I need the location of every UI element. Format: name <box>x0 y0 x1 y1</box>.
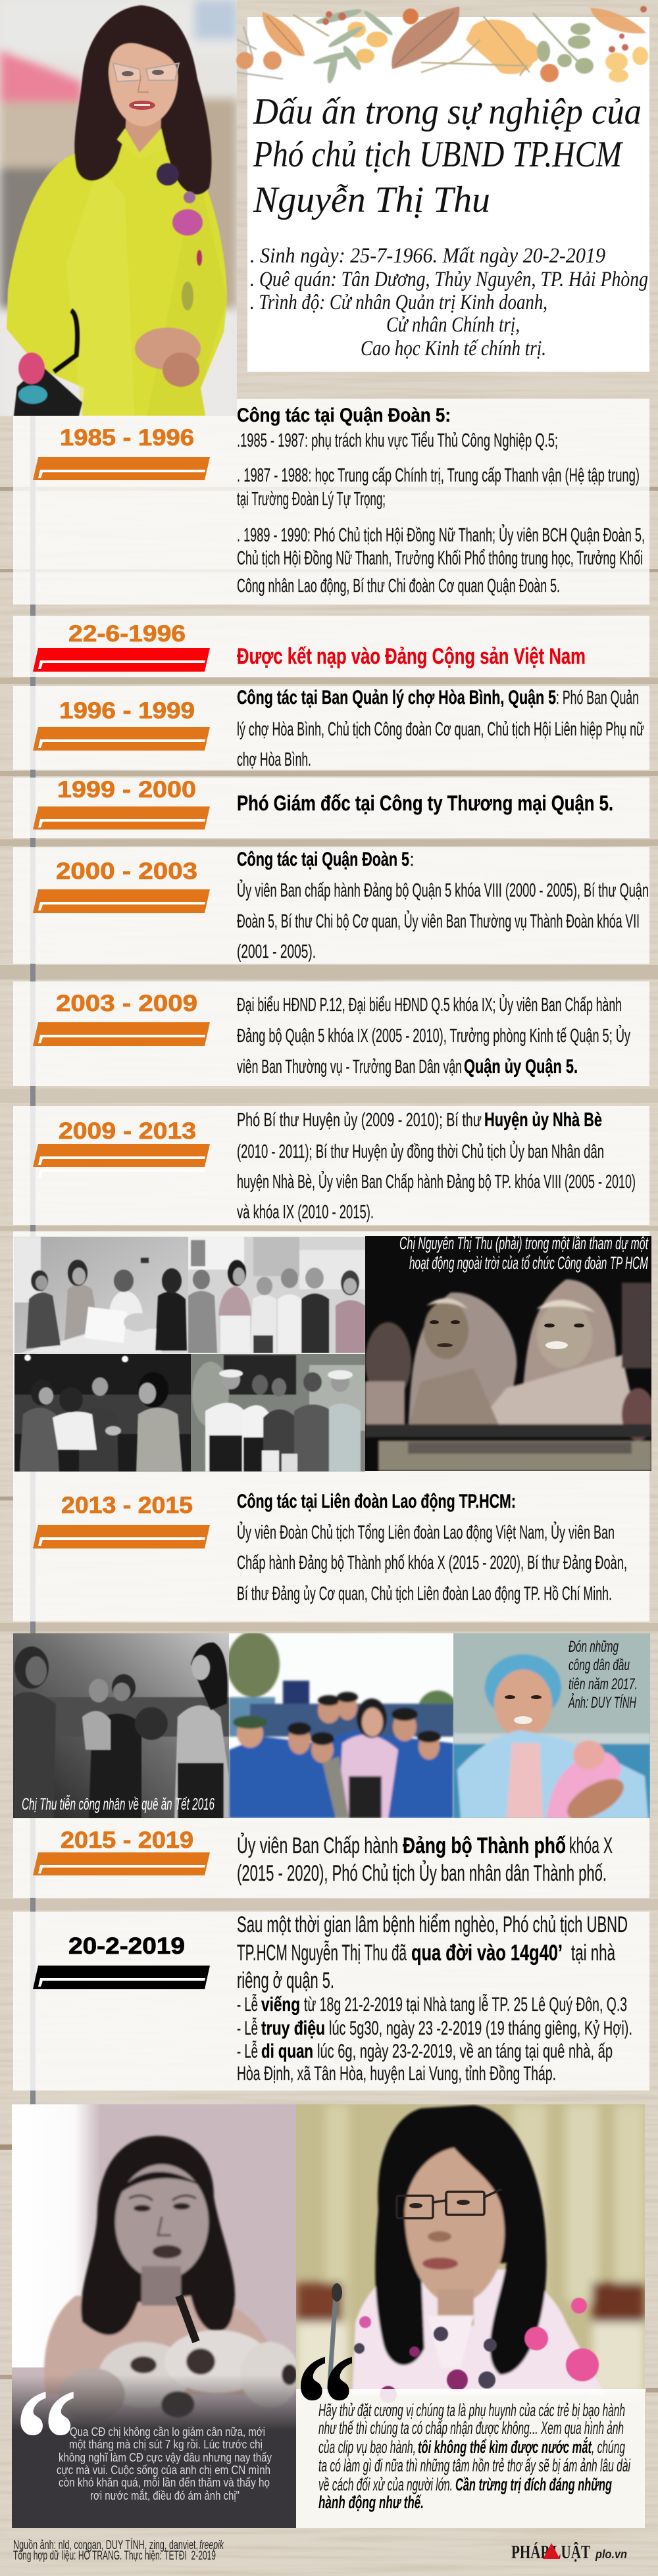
career text: 2015 - 2019: khóa X <box>569 1833 613 1858</box>
quote text: right: , chúng <box>592 2437 625 2457</box>
portrait photo: woman in yellow ao dai <box>0 0 237 421</box>
credits: freepik <box>199 2539 224 2552</box>
panel: 2015-2019 <box>13 1818 649 1898</box>
decoration: autumn leaves <box>236 6 648 84</box>
caption: seeing off workers: Chị Thu tiễn công nhân về quê ăn Tết 2016 <box>22 1795 215 1814</box>
career text: 20-2-2019: truy điệu <box>261 2018 325 2039</box>
logo: Pháp Luật plo.vn: plo.vn <box>595 2548 627 2561</box>
career text: 1985 - 1996 <box>237 405 645 597</box>
career text: 20-2-2019: qua đời vào 14g40’ <box>411 1941 563 1966</box>
career text: 2009 - 2013: và khóa IX (2010 - 2015). <box>237 1202 374 1223</box>
caption: newborn photo <box>568 1638 638 1712</box>
biography facts: Cử nhân Chính trị, <box>386 313 520 337</box>
timeline tag: 2015 - 2019 <box>33 1827 210 1875</box>
career text: 2009 - 2013: Huyện ủy Nhà Bè <box>484 1109 602 1131</box>
title: Nguyễn Thị Thu <box>253 180 490 220</box>
biography facts: . Trình độ: Cử nhân Quản trị Kinh doanh, <box>250 291 547 314</box>
timeline tag: 20-2-2019 <box>33 1933 210 1989</box>
photo: hospital visit <box>14 1237 188 1353</box>
quote text: left: rơi nước mắt, điều đó ám ảnh chị" <box>90 2489 240 2502</box>
photo: night gathering with child <box>14 1354 191 1472</box>
career text: 20-2-2019: di quan <box>261 2041 313 2062</box>
credits <box>13 2539 224 2563</box>
timeline tag: 1996 - 1999 <box>33 698 210 751</box>
credits: Tổng hợp dữ liệu: HỒ TRANG. Thực hiện: TETĐI 2-2019 <box>13 2548 216 2563</box>
quote mark: right: “ <box>295 2324 356 2485</box>
career text: 20-2-2019: - Lễ <box>237 1994 258 2016</box>
quote mark: left: “ <box>14 2359 78 2519</box>
timeline tag: 2000 - 2003 <box>33 858 210 913</box>
timeline tag: 2009 - 2013 <box>33 1118 210 1177</box>
career text: 1996 - 1999: chợ Hòa Bình. <box>237 749 311 770</box>
career text: 20-2-2019: - Lễ <box>237 2041 258 2062</box>
timeline tag: 1996 - 1999: 1996 - 1999 <box>59 698 195 724</box>
timeline tag: 22-6-1996 <box>33 621 210 672</box>
career text: 2000 - 2003: : <box>409 849 415 870</box>
career text: 2003 - 2009: viên Ban Thường vụ - Trưởng Ban Dân vận <box>237 1056 462 1077</box>
timeline tag: 1985 - 1996: 1985 - 1996 <box>60 425 194 451</box>
photo: official holding newborn <box>453 1633 650 1827</box>
quote text: left: một tháng mà chị sút 7 kg rồi. Lúc trước chị <box>69 2438 263 2451</box>
career text: 20-2-2019: viếng <box>261 1994 300 2016</box>
timeline tag: 1999 - 2000 <box>33 777 210 830</box>
quote text: right <box>318 2400 631 2512</box>
photo: seeing off workers <box>13 1633 229 1822</box>
credits: Nguồn ảnh: nld, congan, DUY TÍNH, zing, danviet, <box>13 2539 198 2552</box>
heading card <box>247 17 649 372</box>
career text: 2013 - 2015 <box>237 1491 627 1604</box>
timeline tag: 22-6-1996: 22-6-1996 <box>68 621 186 647</box>
career text: 20-2-2019: riêng ở quận 5. <box>237 1968 334 1993</box>
caption: raincoat photo <box>399 1233 649 1273</box>
panel: 1985-1996 <box>13 399 649 605</box>
career text: 2013 - 2015: Công tác tại Liên đoàn Lao động TP.HCM: <box>237 1491 516 1512</box>
timeline tag: 1999 - 2000: 1999 - 2000 <box>57 777 196 803</box>
panel: 2009-2013 <box>13 1106 649 1225</box>
photo: youth union group <box>227 1631 457 1818</box>
timeline tag: 2003 - 2009 <box>33 991 210 1046</box>
career text: 20-2-2019: tại nhà <box>571 1941 615 1966</box>
career text: 2000 - 2003: (2001 - 2005). <box>237 941 316 962</box>
career text: 2003 - 2009 <box>237 993 630 1077</box>
quote text: right: hành động như thế. <box>318 2492 424 2512</box>
quote text: right: của clip vụ bạo hành, <box>318 2437 416 2457</box>
timeline tag: 1985 - 1996 <box>33 425 210 480</box>
quote text: left: không nghĩ làm CĐ cực vậy đâu nhưng nay thấy <box>59 2451 272 2464</box>
photo: portrait with quote, left <box>12 2104 299 2528</box>
career text: 1996 - 1999 <box>237 687 644 770</box>
career text: 2000 - 2003: Công tác tại Quận Đoàn 5 <box>237 849 409 870</box>
career text: 1985 - 1996: Công tác tại Quận Đoàn 5: <box>237 405 451 426</box>
timeline spine <box>30 416 36 2297</box>
career text: 1985 - 1996: tại Trường Đoàn Lý Tự Trọng; <box>237 489 386 510</box>
photo: group with elders <box>188 1237 365 1353</box>
timeline tag: 2015 - 2019: 2015 - 2019 <box>61 1827 193 1853</box>
timeline tag: 2000 - 2003: 2000 - 2003 <box>56 858 197 884</box>
timeline tag: 2003 - 2009: 2003 - 2009 <box>56 991 197 1016</box>
biography facts: Cao học Kinh tế chính trị. <box>361 337 546 360</box>
career text: 2009 - 2013: Phó Bí thư Huyện ủy (2009 - 2010); Bí thư <box>237 1110 482 1131</box>
quote text: left: cực mà vui. Cuộc sống của anh chị em CN mình <box>57 2464 270 2477</box>
career text: 2015 - 2019: Ủy viên Ban Chấp hành <box>237 1833 398 1858</box>
panel: 1999-2000 <box>13 778 649 838</box>
timeline tag: 20-2-2019: 20-2-2019 <box>68 1933 185 1959</box>
photo: five women at a doorway <box>191 1354 365 1472</box>
timeline tag: 2013 - 2015 <box>33 1493 210 1548</box>
panel: 2013-2015 <box>13 1231 649 1622</box>
career text: 20-2-2019: TP.HCM Nguyễn Thị Thu đã <box>237 1941 407 1966</box>
panel: 20-2-2019 <box>13 1912 649 2091</box>
panel: 2003-2009 <box>13 981 649 1086</box>
logo: Pháp Luật plo.vn: PHÁP LUẬT <box>511 2541 590 2563</box>
caption: newborn photo: Đón những <box>569 1638 619 1656</box>
face details <box>113 63 179 110</box>
timeline tag: 2013 - 2015: 2013 - 2015 <box>61 1493 193 1518</box>
career text: 2009 - 2013 <box>237 1109 636 1223</box>
photo: portrait with quote, right <box>296 2104 645 2528</box>
quote text: right: về cách đối xử của người lớn. <box>318 2475 453 2494</box>
career text: 2015 - 2019 <box>237 1833 613 1886</box>
quote text: left: còn khó khăn quá, mỗi lần đến thăm và thấy họ <box>59 2475 270 2489</box>
panel: 22-6-1996 <box>13 616 649 677</box>
career text: 20-2-2019: - Lễ <box>237 2018 258 2039</box>
panel: 2000-2003 <box>13 847 649 964</box>
panel: 1996-1999 <box>13 686 649 770</box>
title <box>253 91 642 220</box>
biography facts <box>250 244 648 360</box>
biography facts: . Sinh ngày: 25-7-1966. Mất ngày 20-2-2019 <box>250 244 605 268</box>
photo: women in raincoats <box>365 1236 655 1471</box>
career text: 2015 - 2019: Đảng bộ Thành phố <box>403 1833 566 1858</box>
title: Dấu ấn trong sự nghiệp của <box>253 91 642 132</box>
career text: 20-2-2019 <box>237 1912 632 2085</box>
career text: 2003 - 2009: Quận ủy Quận 5. <box>464 1056 578 1077</box>
career text: 2000 - 2003 <box>237 849 649 962</box>
quote text: left <box>57 2425 272 2502</box>
timeline tag: 2009 - 2013: 2009 - 2013 <box>59 1118 196 1144</box>
quote text: left: Qua CĐ chị không cần lo giảm cân nữa, mới <box>70 2425 265 2439</box>
